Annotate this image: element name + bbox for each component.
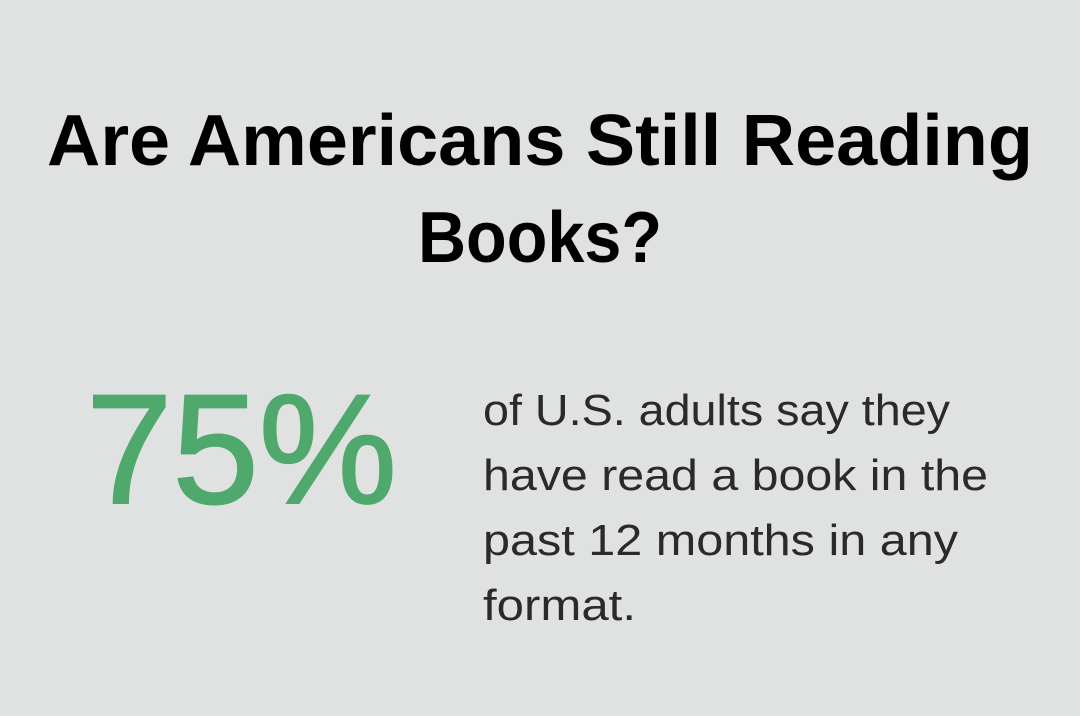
stat description: of U.S. adults say they xyxy=(483,386,950,435)
stat description: past 12 months in any xyxy=(483,516,958,565)
big stat: 75%: 75% xyxy=(86,363,397,537)
title: Are Americans Still Reading xyxy=(47,101,1033,181)
stat description: format. xyxy=(483,581,636,630)
title: Books? xyxy=(418,198,662,278)
stat description: have read a book in the xyxy=(483,451,988,500)
stat description xyxy=(483,386,988,630)
title xyxy=(47,101,1033,278)
